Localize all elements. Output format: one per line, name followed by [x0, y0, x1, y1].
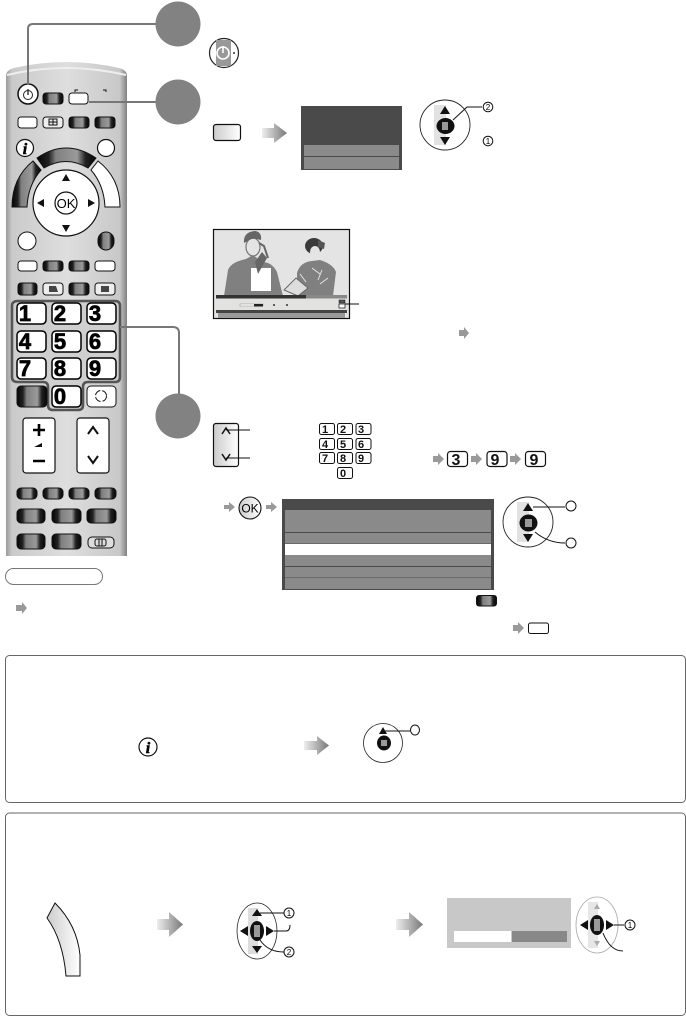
number keypad: 9	[89, 356, 101, 381]
arrow	[396, 912, 423, 937]
return key with arrow	[513, 622, 548, 634]
button icon: step 2	[214, 124, 240, 140]
number keypad: 7	[19, 356, 31, 381]
channel up down key	[214, 424, 250, 466]
small number keys: 9	[358, 453, 364, 465]
leader line: step 1	[28, 24, 157, 85]
number keypad	[12, 301, 120, 410]
top button row	[43, 90, 106, 104]
example keys 3 9 9: 3	[452, 452, 461, 469]
white round button	[98, 140, 114, 156]
note arrow	[16, 602, 27, 614]
number keypad: 0	[54, 384, 66, 409]
cursor dial left right: 1	[628, 921, 633, 930]
small number keys: 1	[322, 424, 328, 436]
top dark arc key	[37, 148, 96, 168]
round button and oval key	[18, 232, 114, 250]
TV screen with banner	[214, 230, 359, 318]
small number keys: 6	[358, 439, 364, 451]
number keypad: 2	[54, 301, 66, 326]
small number keys: 0	[340, 468, 346, 480]
number keypad: 4	[19, 329, 32, 354]
OK button with arrows: OK	[241, 502, 259, 516]
small number keys: 7	[322, 453, 328, 465]
volume key	[23, 418, 55, 473]
power button	[18, 84, 38, 104]
right white arc key	[91, 161, 120, 207]
small number keys: 2	[340, 424, 346, 436]
step badge 1	[156, 2, 200, 46]
arrow: step 2	[262, 123, 287, 143]
panel: colour key steps	[6, 813, 686, 1016]
cursor dial	[364, 724, 420, 762]
fourth button row	[18, 283, 115, 295]
small number keys	[320, 424, 371, 480]
example keys 3 9 9	[433, 452, 546, 469]
panel: information banner	[6, 656, 686, 802]
dark key and refresh key	[17, 386, 116, 407]
cursor dial left right	[576, 897, 635, 953]
example keys 3 9 9: 9	[530, 452, 539, 469]
cursor dial: step 2: 2	[486, 103, 491, 112]
channel list table	[282, 499, 494, 590]
arc key	[47, 903, 80, 976]
menu panel	[301, 106, 402, 170]
info icon	[139, 738, 157, 757]
leader line: step 2	[89, 101, 157, 103]
cursor dial 4-way: 1	[287, 909, 292, 918]
cursor dial 4-way	[237, 903, 294, 959]
icon: TV power switch	[210, 38, 238, 68]
OK button with arrows	[224, 497, 277, 519]
cursor dial 4-way: 2	[287, 948, 292, 957]
arrow	[304, 736, 329, 755]
info button: i	[23, 141, 28, 158]
navigation ring with OK: OK	[57, 196, 76, 211]
info icon: i	[146, 740, 151, 757]
leader line: step 3	[120, 327, 179, 395]
small number keys: 8	[340, 453, 346, 465]
note pill	[6, 568, 102, 584]
number keypad: 8	[54, 356, 66, 381]
small arrow: banner note	[459, 327, 469, 339]
small number keys: 5	[340, 439, 346, 451]
cursor dial: step 2	[420, 100, 493, 150]
small number keys: 3	[358, 424, 364, 436]
third button row	[18, 261, 115, 271]
cursor dial: list	[503, 497, 576, 548]
channel key	[77, 418, 109, 473]
example keys 3 9 9: 9	[491, 452, 500, 469]
arrow	[157, 912, 183, 937]
number keypad: 6	[89, 329, 101, 354]
info button	[16, 140, 34, 158]
second button row	[18, 117, 115, 128]
step badge 3	[156, 394, 200, 438]
cursor dial: step 2: 1	[486, 137, 491, 146]
number keypad: 1	[19, 301, 31, 326]
bottom button rows	[17, 488, 116, 549]
number keypad: 3	[89, 301, 101, 326]
confirmation dialog	[447, 898, 571, 948]
small number keys: 4	[322, 439, 329, 451]
grey key below list	[476, 596, 496, 606]
number keypad: 5	[54, 329, 66, 354]
remote control	[6, 62, 127, 556]
illustration: two people	[224, 231, 336, 296]
navigation ring with OK	[33, 170, 99, 236]
step badge 2	[156, 80, 200, 124]
left dark arc key	[12, 161, 41, 207]
